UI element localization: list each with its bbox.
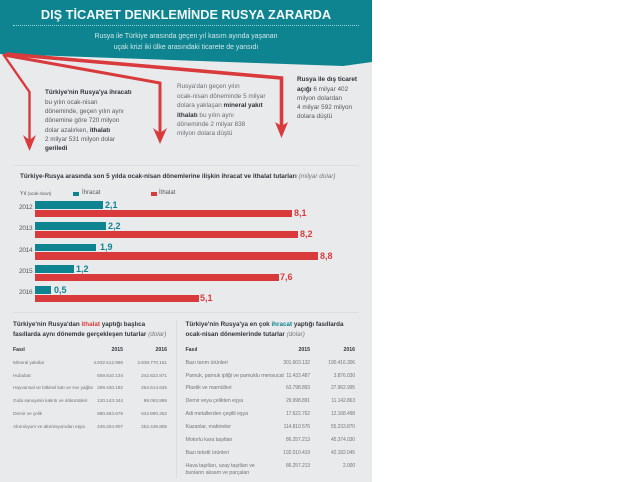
dotted divider	[13, 25, 359, 26]
import table rows: 559.610.134	[97, 374, 123, 378]
import table rows: Hububat	[13, 374, 31, 378]
export table rows: 63.798.893	[286, 385, 310, 391]
export table rows: 3.876.030	[334, 372, 355, 378]
text block: export	[45, 89, 132, 152]
export table rows: Hava taşıtları, uzay taşıtları ve	[186, 462, 255, 468]
text block: mineral fuel	[177, 83, 266, 137]
import table rows: Mineral yakıtlar	[13, 360, 44, 366]
export table rows: Kazanlar, makineler	[186, 424, 231, 430]
export table rows: 2016	[343, 346, 355, 352]
export table rows: 11.142.863	[331, 398, 355, 404]
import table rows: 980.563.676	[97, 412, 123, 417]
text block: mineral fuel: ocak-nisan döneminde 5 milyar	[177, 93, 265, 100]
legend: İthalat	[159, 190, 175, 196]
export table rows: Motorlu kara taşıtları	[186, 437, 232, 443]
import table rows: 242.622.871	[141, 374, 167, 378]
text block: mineral fuel: milyon dolara düştü	[177, 130, 232, 137]
row 2014	[19, 242, 333, 261]
export table rows: 45.374.030	[331, 437, 355, 443]
export table rows: bunların aksam ve parçaları	[186, 470, 249, 476]
export table rows: 27.962.995	[331, 385, 355, 391]
export table heading: Türkiye'nin Rusya'ya en çok ihracat yaptığı fasıllarda	[186, 321, 344, 328]
export table rows: 11.433.487	[286, 372, 310, 378]
export table rows: 12.168.498	[331, 411, 355, 417]
header band	[0, 0, 372, 66]
export table rows: 55.233.870	[331, 424, 355, 430]
legend	[20, 188, 176, 196]
row 2013: 8,2	[300, 229, 313, 239]
row 2014: 1,9	[100, 242, 113, 252]
text block: trade deficit: açığı 6 milyar 402	[297, 86, 348, 93]
import table rows: 299.440.192	[97, 386, 123, 391]
import table rows: 642.890.252	[141, 412, 167, 417]
title: DIŞ TİCARET DENKLEMİNDE RUSYA ZARARDA	[41, 7, 331, 22]
row 2015: 1,2	[76, 264, 89, 274]
export table rows: 86.257.213	[286, 437, 310, 443]
row 2015	[19, 264, 293, 282]
row 2016: 5,1	[200, 293, 213, 303]
import table rows: Demir ve çelik	[13, 412, 42, 417]
import table heading: fasıllarda aynı dönemde gerçekleşen tutarlar (dolar)	[13, 331, 166, 338]
export table rows: 86.257.213	[286, 462, 310, 468]
text block: mineral fuel: ithalatı bu yılın aynı	[177, 112, 234, 119]
import table rows: 2015	[111, 346, 123, 352]
row 2012: 8,1	[294, 208, 307, 218]
import table rows: 120.143.344	[97, 399, 123, 404]
text block: export: geriledi	[45, 145, 67, 152]
export table rows: 2015	[298, 346, 310, 352]
export table rows: 114.810.576	[284, 424, 310, 430]
export table rows: Bazı tarım ürünleri	[186, 360, 228, 366]
arrow 3	[6, 54, 288, 138]
text block: trade deficit: 4 milyar 592 milyon	[297, 104, 352, 111]
row 2016: 0,5	[54, 285, 67, 295]
row 2012: 2,1	[105, 200, 118, 210]
import table rows: 2.838.770.151	[137, 360, 167, 366]
subtitle: uçak krizi iki ülke arasındaki ticarete de yansıdı	[114, 44, 258, 50]
export table rows: 17.622.762	[286, 411, 310, 417]
row 2015: 7,6	[280, 272, 293, 282]
export table rows	[186, 346, 355, 476]
row 2013: 2013	[19, 225, 32, 232]
text block: trade deficit: Rusya ile dış ticaret	[297, 76, 357, 83]
legend: İhracat	[82, 190, 100, 196]
text block: trade deficit	[297, 76, 357, 120]
text block: export: 2 milyar 531 milyon dolar	[45, 136, 115, 143]
text block: mineral fuel: Rusya'dan geçen yılın	[177, 83, 240, 90]
import table rows: 2016	[155, 346, 167, 352]
export table rows: 29.998.891	[286, 398, 310, 404]
subtitle	[94, 32, 278, 50]
import table rows	[13, 346, 167, 430]
chart heading: Türkiye-Rusya arasında son 5 yılda ocak-nisan dönemlerine ilişkin ihracat ve ithalat tutarları (milyar dolar)	[20, 172, 335, 180]
subtitle: Rusya ile Türkiye arasında geçen yıl kasım ayında yaşanan	[94, 33, 278, 40]
export table rows: 301.603.132	[283, 360, 310, 366]
import table rows: Fasıl	[13, 346, 25, 352]
legend: Yıl (ocak-nisan)	[20, 190, 51, 196]
import table heading: Türkiye'nin Rusya'dan ithalat yaptığı başlıca	[13, 321, 145, 328]
row 2014: 2014	[19, 247, 32, 254]
export table rows: Bazı tekstil ürünleri	[186, 450, 229, 456]
arrow 1	[3, 54, 36, 151]
panel: import table	[13, 321, 167, 430]
export table heading	[186, 321, 344, 338]
import table rows: Hayvansal ve bitkisel katı ve sıvı yağlar	[13, 386, 93, 391]
text block: trade deficit: dolara düştü	[297, 113, 332, 120]
arrow 2	[4, 55, 167, 144]
import table rows: 89.063.895	[144, 399, 167, 404]
arrows	[2, 52, 288, 151]
export table rows: Pamuk, pamuk ipliği ve pamuklu mensucat	[186, 372, 284, 378]
import table rows: Alüminyum ve alüminyumdan eşya	[13, 425, 85, 430]
row 2016: 2016	[19, 289, 32, 296]
import table heading	[13, 321, 166, 338]
panel: grey background	[0, 0, 372, 482]
export table rows: 42.182.045	[331, 450, 355, 456]
export table rows: Adi metallerden çeşitli eşya	[186, 411, 248, 417]
export table rows: 2.000	[343, 462, 355, 468]
import table rows: 252.435.805	[141, 425, 167, 430]
import table rows: 264.614.645	[141, 386, 167, 391]
text block: export: bu yılın ocak-nisan	[45, 99, 98, 106]
text block: export: dolar azalırken, ithalatı	[45, 127, 110, 134]
panel: export table	[186, 321, 355, 476]
text block: mineral fuel: dolara yaklaşan mineral yakıt	[177, 102, 263, 109]
export table rows: Plastik ve mamülleri	[186, 385, 231, 391]
row 2013: 2,2	[108, 221, 121, 231]
row 2012	[19, 200, 307, 218]
row 2012: 2012	[19, 204, 32, 211]
text block: export: dönemine göre 720 milyon	[45, 117, 119, 124]
export table rows: 190.416.306	[328, 360, 355, 366]
import table rows: 4.932.512.996	[93, 360, 123, 366]
bar chart	[19, 188, 333, 303]
row 2014: 8,8	[320, 251, 333, 261]
text block: export: döneminde, geçen yılın aynı	[45, 108, 124, 115]
text block: trade deficit: milyon dolardan	[297, 95, 342, 102]
row 2013	[19, 221, 313, 239]
text block: mineral fuel: döneminde 2 milyar 838	[177, 121, 245, 128]
import table rows: 245.204.907	[97, 425, 123, 430]
export table rows: 192.010.419	[283, 450, 310, 456]
export table rows: Demir veya çelikten eşya	[186, 398, 243, 404]
row 2016	[19, 285, 213, 303]
row 2015: 2015	[19, 268, 32, 275]
import table rows: Gıda sanayinin kalıntı ve döküntüleri	[13, 399, 87, 404]
text block: export: Türkiye'nin Rusya'ya ihracatı	[45, 89, 132, 96]
export table rows: Fasıl	[186, 346, 197, 352]
export table heading: ocak-nisan dönemlerinde tutarlar (dolar)	[186, 331, 305, 338]
